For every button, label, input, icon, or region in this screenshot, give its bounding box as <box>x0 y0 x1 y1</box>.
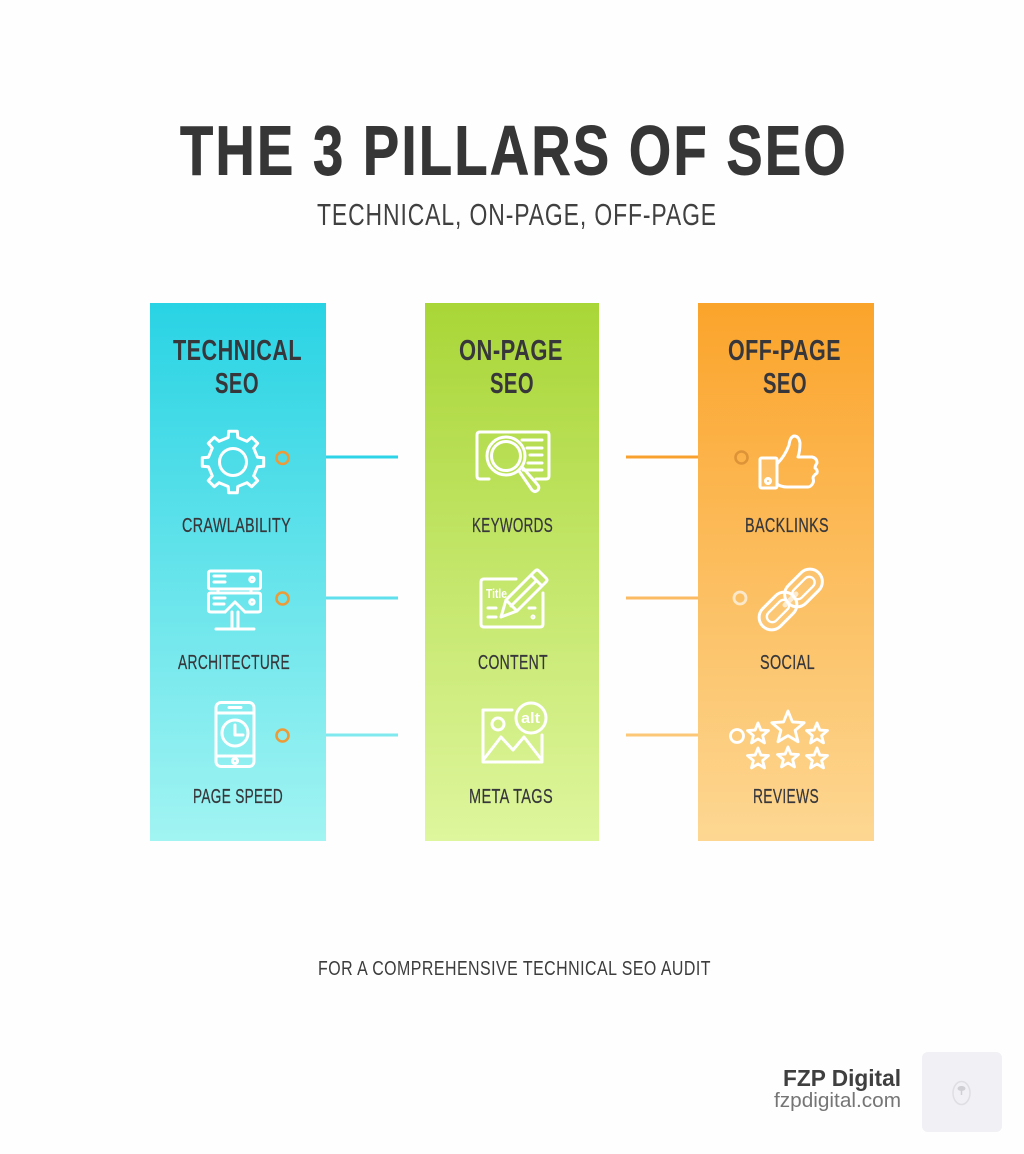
icon: thumbs up <box>760 436 817 488</box>
icon: server architecture <box>208 571 260 629</box>
heading: technical SEO: TECHNICAL <box>173 335 302 367</box>
heading: on-page SEO: ON-PAGE <box>459 335 563 367</box>
panel: on-page SEO <box>425 303 599 841</box>
icon: chain links <box>754 564 828 635</box>
dot: backlinks <box>736 452 748 464</box>
label: architecture: ARCHITECTURE <box>178 652 290 674</box>
label: meta tags: META TAGS <box>469 786 553 808</box>
label: backlinks: BACKLINKS <box>745 515 829 537</box>
dot: architecture <box>276 592 288 604</box>
panel: technical SEO <box>150 303 326 841</box>
icon: phone clock <box>216 702 254 766</box>
icon: magnifier over page <box>477 432 549 492</box>
heading: on-page SEO <box>459 335 563 400</box>
heading: off-page SEO: SEO <box>763 368 807 400</box>
connector: crawlability to keywords <box>326 456 398 458</box>
label: social: SOCIAL <box>760 652 815 674</box>
label: keywords: KEYWORDS <box>472 515 553 537</box>
connector: page speed to meta tags <box>326 734 398 736</box>
connector: keywords to backlinks <box>626 456 698 458</box>
title: THE 3 PILLARS OF SEO <box>180 112 848 190</box>
heading: off-page SEO <box>728 335 841 400</box>
heading: on-page SEO: SEO <box>490 368 534 400</box>
label: crawlability: CRAWLABILITY <box>182 515 291 537</box>
icon: title and pencil: Title <box>486 586 507 601</box>
connector: meta tags to reviews <box>626 734 698 736</box>
icon: gear <box>202 431 264 493</box>
label: content: CONTENT <box>478 652 548 674</box>
dot: reviews <box>730 730 744 742</box>
brand name: FZP Digital <box>783 1065 901 1091</box>
icon: image alt text <box>483 703 546 762</box>
dot: social <box>734 592 746 604</box>
icon: title and pencil <box>481 570 547 627</box>
subtitle: TECHNICAL, ON-PAGE, OFF-PAGE <box>317 197 717 232</box>
dot: page speed <box>276 730 288 742</box>
heading: technical SEO: SEO <box>215 368 259 400</box>
label: page speed: PAGE SPEED <box>193 786 283 808</box>
logo tile <box>922 1052 1002 1132</box>
brand url: fzpdigital.com <box>774 1090 901 1112</box>
label: reviews: REVIEWS <box>753 786 819 808</box>
footer caption: FOR A COMPREHENSIVE TECHNICAL SEO AUDIT <box>318 958 711 980</box>
heading: off-page SEO: OFF-PAGE <box>728 335 841 367</box>
connector: content to social <box>626 596 698 600</box>
panel: off-page SEO <box>698 303 874 841</box>
dot: crawlability <box>276 452 288 464</box>
heading: technical SEO <box>173 335 302 400</box>
connector: architecture to content <box>326 596 398 600</box>
icon: image alt text: alt <box>521 710 540 727</box>
icon: stars <box>748 711 827 768</box>
